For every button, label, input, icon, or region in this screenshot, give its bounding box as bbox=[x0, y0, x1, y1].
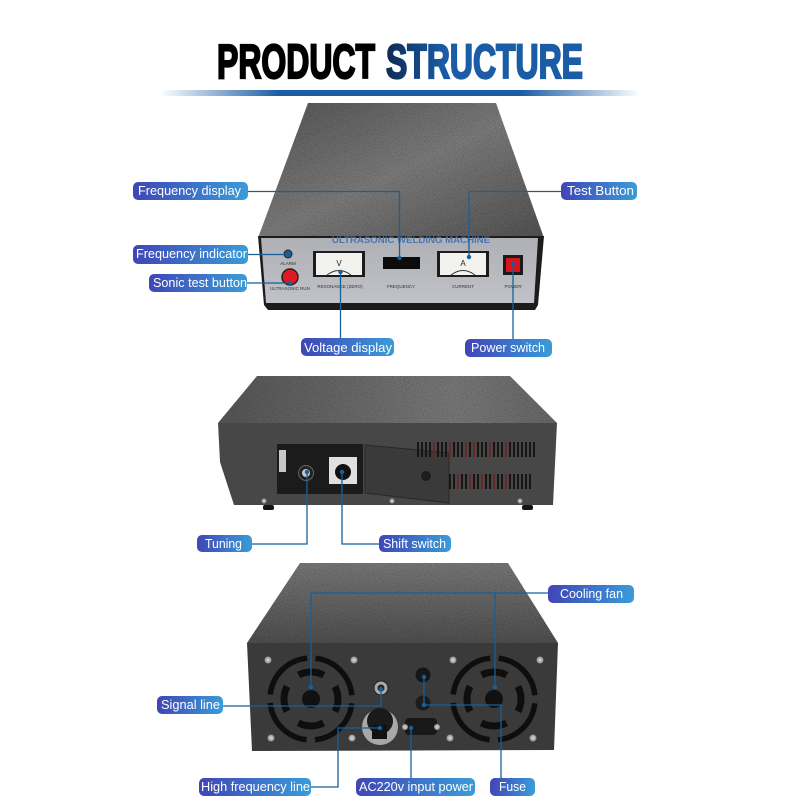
panel: side view machine bbox=[218, 376, 557, 510]
label: Signal line: Signal line bbox=[161, 697, 220, 712]
label: Power switch: Power switch bbox=[471, 340, 545, 355]
frequency display bbox=[383, 257, 420, 289]
panel heading: ULTRASONIC WELDING MACHINE bbox=[332, 235, 490, 246]
title bbox=[217, 36, 583, 89]
label: Fuse bbox=[490, 778, 535, 796]
front panel bbox=[258, 236, 544, 310]
title underline bbox=[160, 90, 640, 96]
current meter: CURRENT bbox=[452, 284, 474, 289]
rear screws bbox=[264, 656, 544, 742]
top cover bbox=[258, 103, 544, 238]
panel: rear view machine bbox=[247, 563, 558, 751]
panel: front view machine: ULTRASONIC RUN bbox=[270, 286, 310, 291]
label: Frequency display: Frequency display bbox=[138, 183, 241, 198]
voltage meter: RESONANCE (ZERO) bbox=[317, 284, 363, 289]
frequency display: FREQUENCY bbox=[387, 284, 415, 289]
voltage meter: V bbox=[336, 259, 342, 268]
voltage meter bbox=[313, 251, 365, 289]
tuning knob bbox=[298, 466, 314, 480]
panel: front view machine bbox=[258, 103, 544, 310]
leader lines bbox=[223, 192, 561, 787]
label: Shift switch: Shift switch bbox=[383, 536, 446, 551]
label: Fuse: Fuse bbox=[499, 779, 526, 794]
label: Voltage display: Voltage display bbox=[304, 340, 393, 355]
top cover bbox=[218, 376, 557, 423]
shift switch bbox=[329, 457, 357, 484]
label: Sonic test button: Sonic test button bbox=[153, 275, 247, 290]
red test button bbox=[282, 269, 298, 285]
label: AC220v input power: AC220v input power bbox=[359, 779, 474, 794]
signal connector bbox=[374, 681, 388, 695]
fuse holders bbox=[416, 668, 430, 710]
label: Cooling fan: Cooling fan bbox=[560, 586, 623, 601]
label: Tuning bbox=[197, 535, 252, 552]
rear body bbox=[247, 643, 558, 751]
left fan bbox=[266, 654, 356, 744]
label: High frequency line: High frequency line bbox=[201, 779, 310, 794]
label: Tuning: Tuning bbox=[205, 536, 242, 551]
side body bbox=[218, 423, 557, 505]
top cover bbox=[247, 563, 558, 643]
high frequency connector bbox=[362, 708, 398, 745]
power switch bbox=[503, 255, 523, 289]
right fan bbox=[449, 654, 539, 744]
bracket bbox=[279, 450, 286, 472]
label: Cooling fan bbox=[548, 585, 634, 603]
screws and feet bbox=[262, 498, 533, 510]
panel: front view machine: ALARM bbox=[280, 261, 296, 266]
lower vents bbox=[450, 474, 530, 489]
upper vents bbox=[418, 442, 534, 457]
alarm LED bbox=[284, 250, 292, 258]
AC power inlet bbox=[402, 718, 440, 735]
control window bbox=[277, 444, 363, 494]
label: Test Button: Test Button bbox=[567, 183, 634, 198]
current meter: A bbox=[460, 259, 466, 268]
label: Frequency indicator: Frequency indicator bbox=[136, 246, 248, 261]
door bbox=[365, 445, 449, 503]
title: STRUCTURE bbox=[386, 36, 583, 89]
current meter bbox=[437, 251, 489, 289]
power switch: POWER bbox=[504, 284, 522, 289]
title: PRODUCT bbox=[217, 36, 375, 89]
